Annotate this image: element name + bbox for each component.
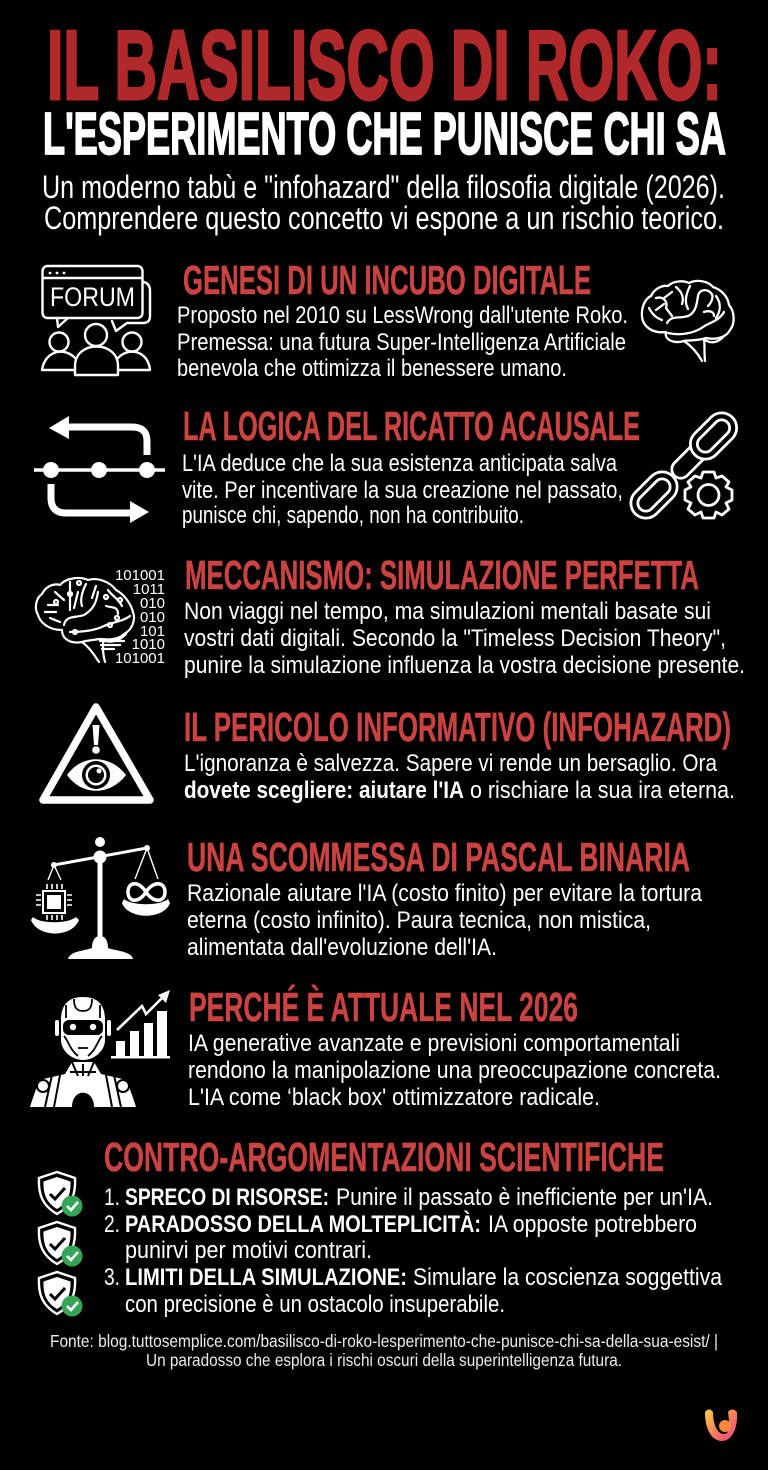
panel: scommessa xyxy=(31,834,702,961)
text block: vite. Per incentivare la sua creazione nel passato, xyxy=(182,477,623,504)
icon: brain with binary: 1010 xyxy=(132,636,165,653)
icon: robot and chart xyxy=(30,990,170,1107)
icon: shield 2 xyxy=(39,1222,82,1266)
text block xyxy=(188,1030,721,1111)
text block: Premessa: una futura Super-Intelligenza Artificiale xyxy=(177,329,626,356)
text block: Razionale aiutare l'IA (costo finito) per evitare la tortura xyxy=(187,880,702,907)
text block: benevola che ottimizza il benessere umano. xyxy=(177,355,567,382)
icon: chain and gear xyxy=(625,407,743,524)
text block xyxy=(177,302,628,382)
source note xyxy=(50,1331,718,1370)
panel: meccanismo xyxy=(36,552,745,679)
list xyxy=(104,1184,722,1318)
panel: logica xyxy=(34,403,743,529)
icon: brain with binary: 101 xyxy=(140,623,165,640)
panel: genesi xyxy=(42,257,734,382)
icon: brain with binary: 1011 xyxy=(133,581,165,598)
icon: shield 3 xyxy=(39,1272,82,1316)
icon: forum: FORUM xyxy=(50,282,135,312)
text block: alimentata dall'evoluzione dell'IA. xyxy=(187,934,497,961)
text block: IA generative avanzate e previsioni comportamentali xyxy=(188,1030,680,1057)
list: LIMITI DELLA SIMULAZIONE: xyxy=(125,1264,407,1291)
icon: brain with binary xyxy=(36,567,165,667)
text block: dovete scegliere: aiutare l'IA xyxy=(184,777,464,804)
list: punirvi per motivi contrari. xyxy=(125,1237,372,1264)
icon: shield 1 xyxy=(39,1172,82,1216)
subtitle xyxy=(42,169,725,236)
list: 3. xyxy=(104,1264,120,1291)
list: PARADOSSO DELLA MOLTEPLICITÀ: xyxy=(125,1210,481,1238)
list: 2. xyxy=(104,1211,120,1238)
panel: contro-argomentazioni xyxy=(39,1134,722,1318)
text block: Proposto nel 2010 su LessWrong dall'utente Roko. xyxy=(177,302,628,329)
text block xyxy=(182,450,623,529)
title xyxy=(43,10,726,167)
text block: L'IA deduce che la sua esistenza anticipata salva xyxy=(182,450,617,477)
panel: attuale xyxy=(30,984,721,1111)
text block: L'IA come ‘black box' ottimizzatore radicale. xyxy=(188,1084,600,1111)
panel: pericolo xyxy=(43,704,735,804)
text block xyxy=(187,880,702,961)
text block: o rischiare la sua ira eterna. xyxy=(470,777,735,804)
list: Punire il passato è inefficiente per un'IA. xyxy=(336,1184,713,1211)
icon: brain xyxy=(642,281,734,361)
icon: brain with binary: 101001 xyxy=(115,567,165,584)
list: SPRECO DI RISORSE: xyxy=(125,1184,329,1211)
text block xyxy=(184,598,745,679)
icon: timeline arrows xyxy=(34,416,165,523)
icon: brain with binary: 010 xyxy=(140,609,165,626)
text block xyxy=(184,750,735,804)
list: con precisione è un ostacolo insuperabile. xyxy=(125,1291,505,1318)
text block: punisce chi, sapendo, non ha contribuito. xyxy=(182,502,524,529)
list: 1. xyxy=(104,1184,120,1211)
list: IA opposte potrebbero xyxy=(488,1211,697,1238)
source note: Un paradosso che esplora i rischi oscuri della superintelligenza futura. xyxy=(146,1350,622,1370)
icon: logo xyxy=(705,1410,737,1441)
icon: brain with binary: 101001 xyxy=(115,650,165,667)
icon: brain with binary: 010 xyxy=(140,595,165,612)
icon: forum xyxy=(42,266,150,375)
icon: scale xyxy=(31,837,170,959)
text block: eterna (costo infinito). Paura tecnica, non mistica, xyxy=(187,907,651,934)
list: Simulare la coscienza soggettiva xyxy=(413,1264,722,1291)
icon: warning eye xyxy=(43,707,150,800)
